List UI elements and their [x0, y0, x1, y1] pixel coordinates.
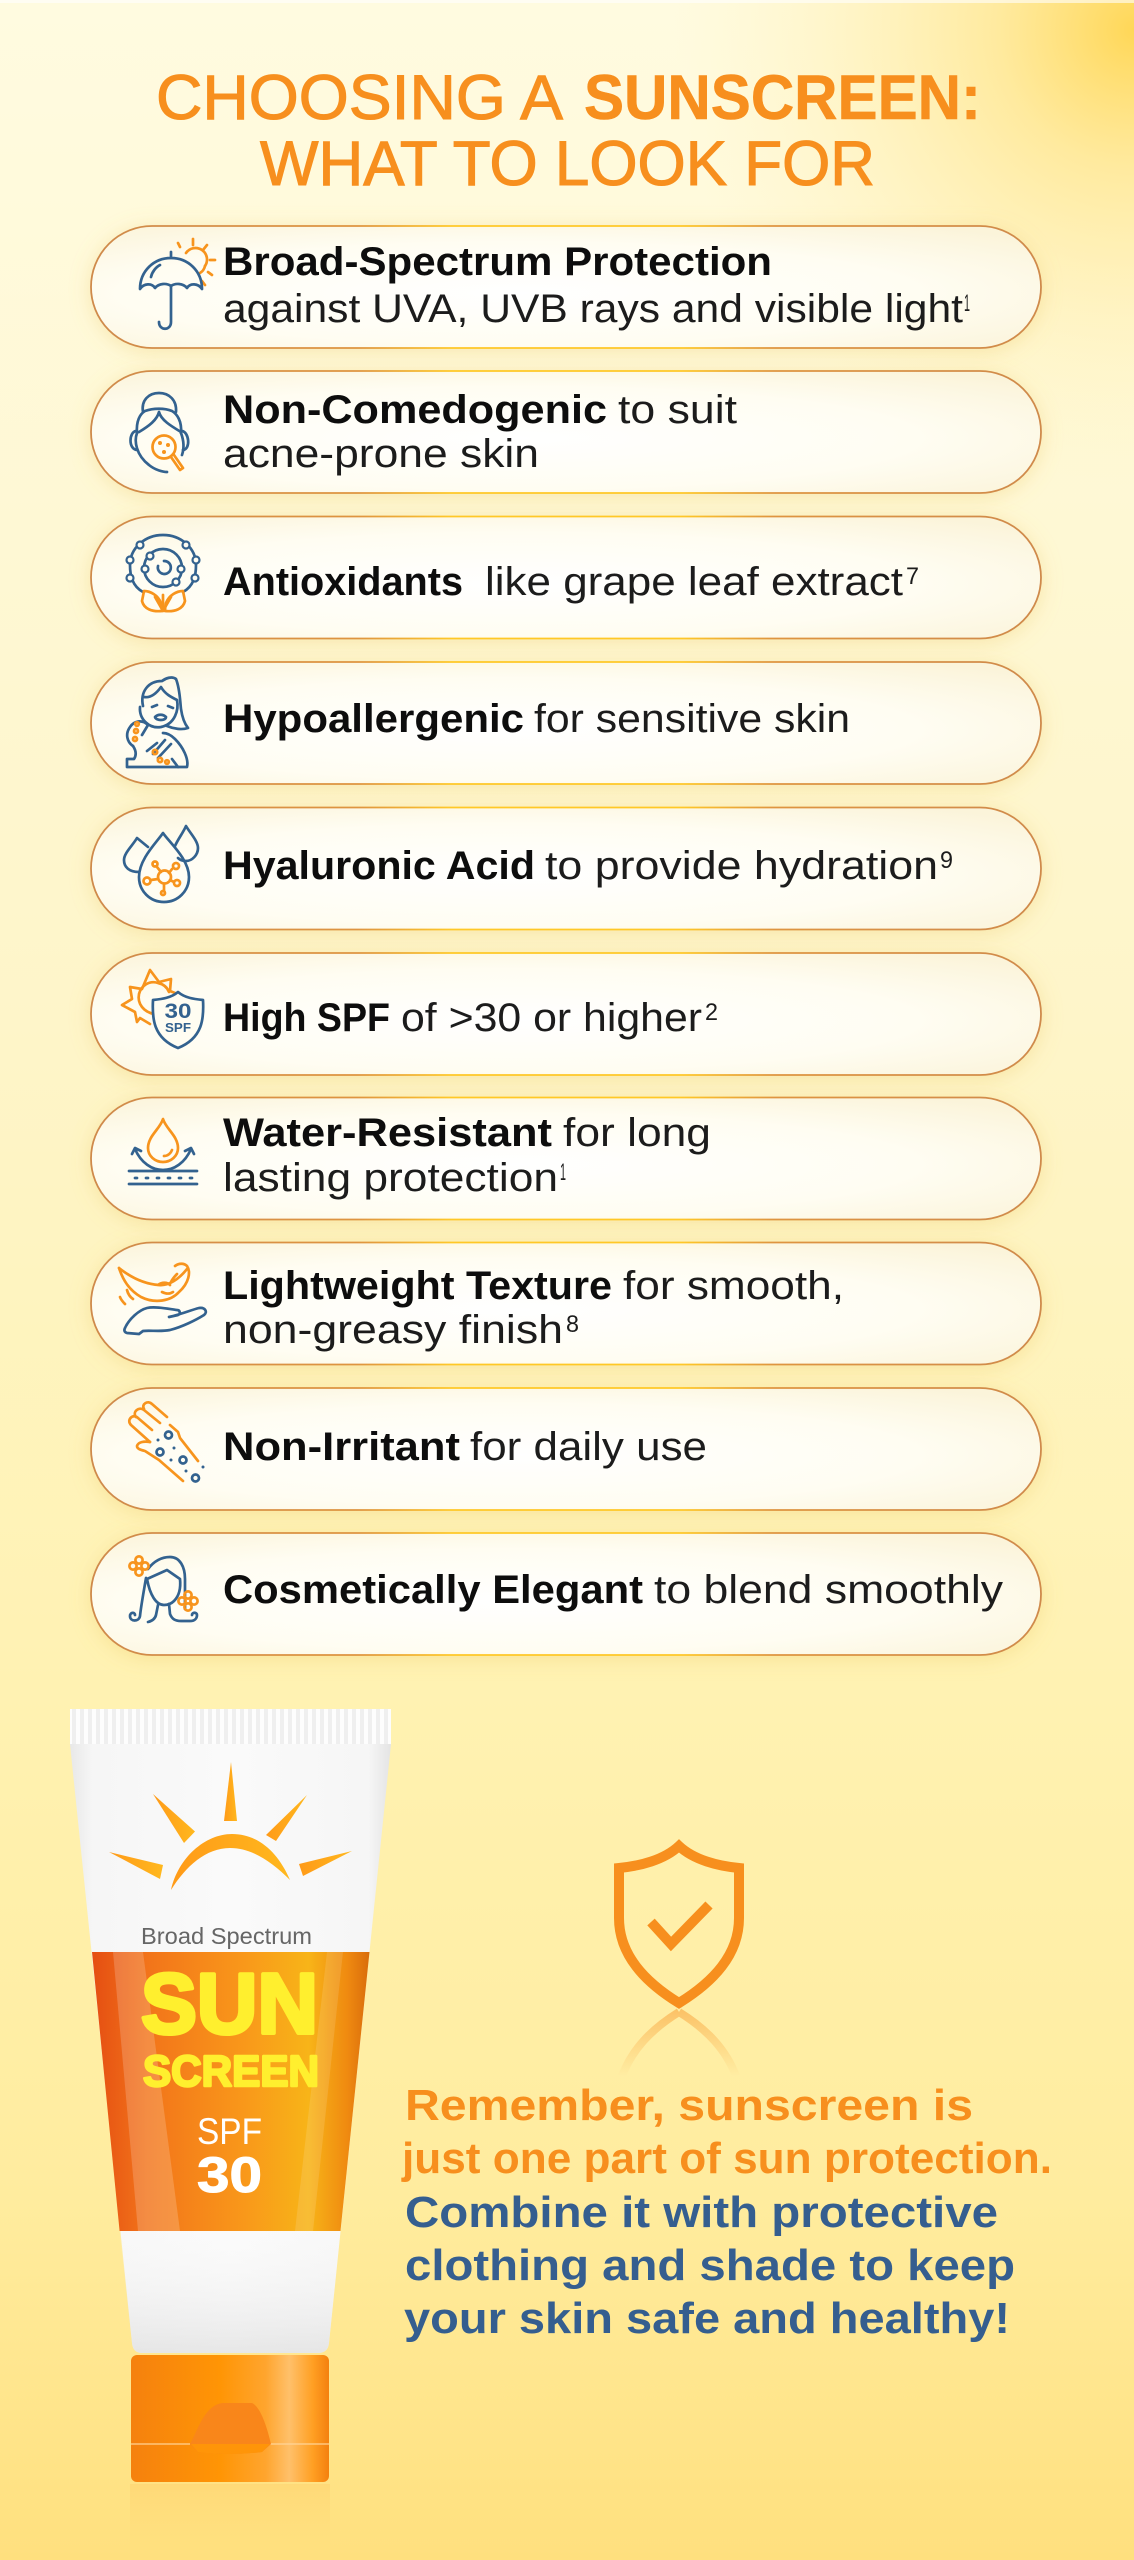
tube crimp [70, 1709, 391, 1745]
panel: water-resistant [91, 1098, 1041, 1220]
text: for long [563, 1111, 711, 1155]
text: of >30 or higher [401, 996, 702, 1040]
icon: hand with irritation spots [129, 1402, 204, 1482]
text: for smooth, [623, 1264, 844, 1308]
text [223, 560, 919, 604]
text [223, 996, 718, 1040]
closing message: just one part of sun protection. [401, 2134, 1052, 2183]
text: against UVA, UVB rays and visible light [223, 287, 963, 331]
icon: feather over hand [119, 1264, 206, 1334]
tube cap [131, 2355, 329, 2482]
panel: non-comedogenic [91, 371, 1041, 493]
spf value [197, 2111, 262, 2203]
sunscreen tube illustration [70, 1709, 391, 2560]
product name: SUN [141, 1957, 318, 2052]
lower white shading [120, 2231, 340, 2353]
text [223, 388, 737, 476]
title: CHOOSING A [156, 63, 563, 133]
icon: water drop on membrane [129, 1119, 197, 1184]
panel: broad-spectrum protection: 1 [964, 290, 970, 317]
title: WHAT TO LOOK FOR [260, 129, 875, 199]
panel: cosmetically elegant [91, 1533, 1041, 1655]
shield label: 30 [164, 1000, 192, 1023]
spf value: 30 [197, 2147, 262, 2203]
text [223, 1264, 844, 1352]
closing message [401, 2081, 1052, 2343]
panel: high spf [91, 953, 1041, 1075]
text: 9 [940, 847, 953, 874]
text [223, 1425, 707, 1469]
closing message: your skin safe and healthy! [404, 2294, 1010, 2343]
text: 7 [906, 563, 919, 590]
text [223, 697, 850, 741]
icon: water drops with molecule [124, 826, 198, 902]
closing message: Combine it with protective [405, 2188, 998, 2237]
text: Water-Resistant [223, 1111, 552, 1155]
sun logo [109, 1762, 352, 1890]
text: lasting protection [223, 1156, 558, 1200]
panel: broad-spectrum protection [91, 226, 1041, 348]
text [223, 240, 970, 331]
icon: sun and SPF shield [122, 970, 203, 1048]
text: for daily use [470, 1425, 707, 1469]
text: 2 [705, 999, 718, 1026]
icon: woman with flowers [129, 1556, 198, 1622]
spf value: SPF [197, 2111, 262, 2152]
text [223, 1111, 711, 1200]
title [156, 63, 981, 199]
icon: shield with checkmark [619, 1846, 739, 2076]
closing message: clothing and shade to keep [405, 2241, 1015, 2290]
text: Non-Comedogenic [223, 388, 607, 432]
text: non-greasy finish [223, 1308, 563, 1352]
text: Lightweight Texture [223, 1264, 612, 1308]
icon: molecule rings and leaves [126, 535, 200, 611]
panel: non-irritant [91, 1388, 1041, 1510]
tube body [70, 1744, 391, 2353]
text: Hypoallergenic [223, 697, 524, 741]
icon: umbrella and sun [140, 239, 215, 329]
product name [141, 1957, 319, 2096]
label: broad spectrum: Broad Spectrum [141, 1923, 312, 1949]
panel: lightweight texture [91, 1242, 1041, 1364]
text: High SPF [223, 996, 390, 1040]
text [223, 844, 953, 888]
text: acne-prone skin [223, 432, 539, 476]
orange label band [92, 1952, 370, 2231]
text [223, 1568, 1003, 1612]
icon: woman scratching arm [127, 678, 188, 767]
closing message: Remember, sunscreen is [405, 2081, 973, 2130]
panel: antioxidants [91, 516, 1041, 638]
tube reflection [130, 2484, 330, 2560]
panel: hypoallergenic [91, 662, 1041, 784]
text: for sensitive skin [534, 697, 850, 741]
panel: hyaluronic acid [91, 808, 1041, 930]
text: Cosmetically Elegant [223, 1568, 643, 1612]
text: Hyaluronic Acid [223, 844, 535, 888]
text: Broad-Spectrum Protection [223, 240, 772, 284]
text: to provide hydration [545, 844, 938, 888]
text: Antioxidants [223, 560, 463, 604]
text: like grape leaf extract [485, 560, 903, 604]
text: to suit [618, 388, 737, 432]
text: 1 [560, 1159, 566, 1186]
text: 8 [566, 1311, 579, 1338]
title: SUNSCREEN: [584, 63, 981, 133]
icon: sun and SPF shield: SPF [165, 1021, 191, 1035]
product name: SCREEN [143, 2047, 319, 2096]
text: Non-Irritant [223, 1425, 460, 1469]
text: to blend smoothly [654, 1568, 1003, 1612]
icon: face with magnifier [130, 393, 188, 472]
